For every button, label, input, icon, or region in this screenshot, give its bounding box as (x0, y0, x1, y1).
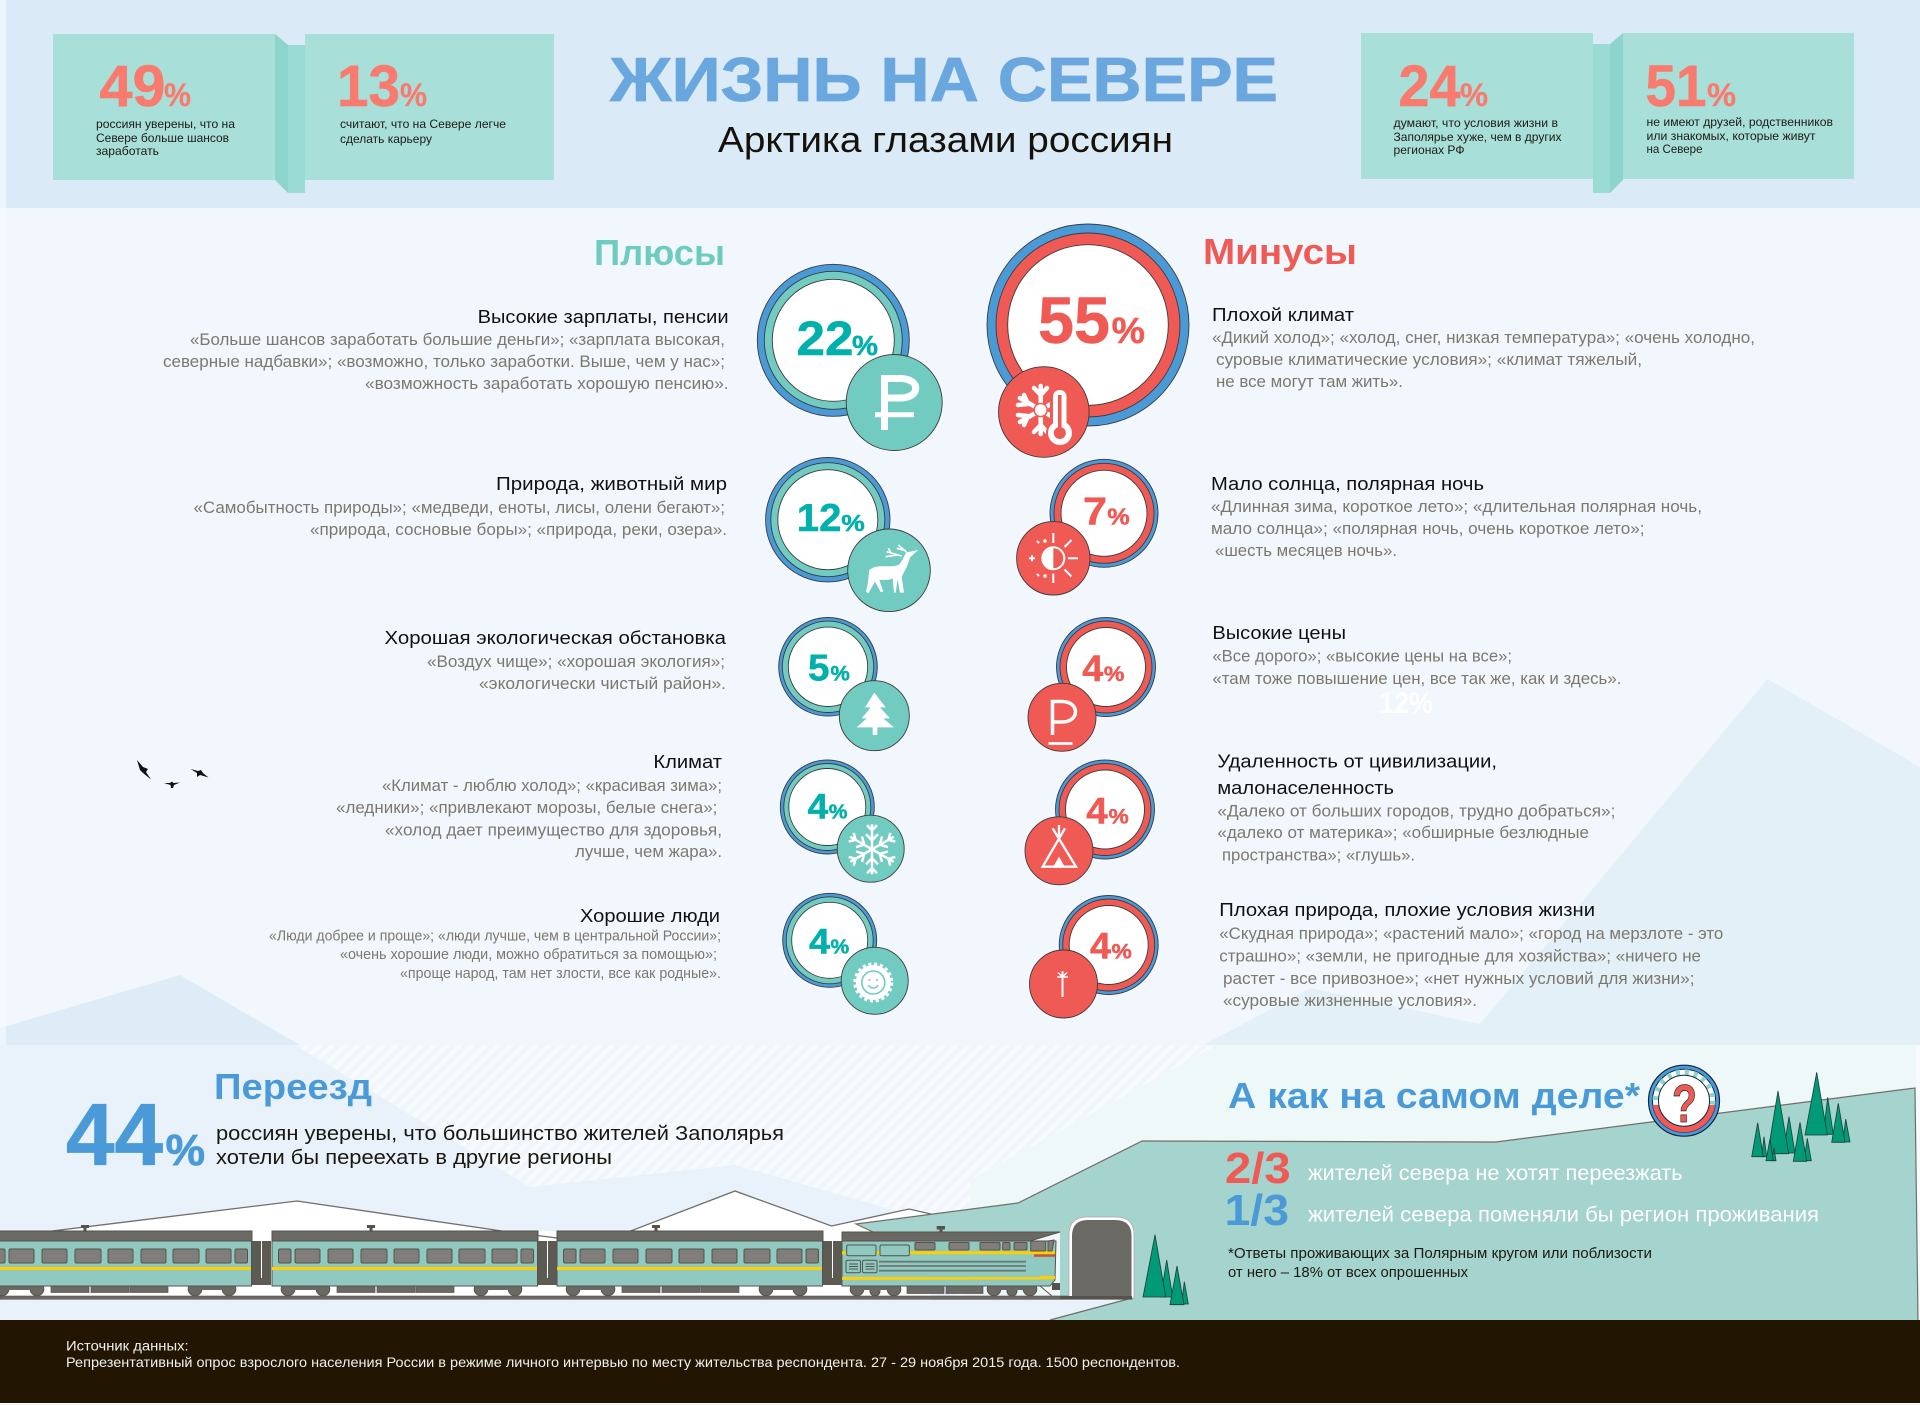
stat box: 49%: 49 (100, 54, 166, 119)
gauge: 55% climate: % (1112, 310, 1145, 351)
icon: snowflake and thermometer (1018, 386, 1074, 447)
text block: high prices: Высокие цены (1212, 622, 1346, 643)
text block: remoteness (1217, 750, 1615, 864)
text block: poor nature (1219, 899, 1723, 1010)
stat: two thirds: 2/3 (1225, 1144, 1291, 1193)
big stat: 44%: 44 (66, 1085, 163, 1184)
text block: good people (269, 905, 721, 982)
snowy mountains behind train (0, 1191, 931, 1300)
gauge: 4% poor nature: % (1112, 940, 1132, 963)
stat box: 49%: россиян уверены, что на (96, 117, 235, 131)
gauge: 5% ecology: % (830, 663, 850, 686)
text block: bad climate (1212, 304, 1755, 391)
gauge: 4% poor nature: 4 (1090, 925, 1111, 966)
text block: remoteness: малонаселенность (1217, 777, 1394, 798)
gauge: 4% high prices: % (1104, 663, 1125, 686)
text block: climate: «Климат - люблю холод»; «красивая зима»; (382, 777, 722, 795)
heading: moving: Переезд (214, 1066, 372, 1107)
stat: one third: жителей севера поменяли бы регион проживания (1308, 1202, 1819, 1226)
subtitle: Арктика глазами россиян (718, 119, 1173, 160)
stat box: 13%: считают, что на Севере легче (340, 117, 506, 131)
text block: good people: «проще народ, там нет злости, все как родные». (400, 966, 721, 982)
panel: header band (0, 0, 1920, 208)
icon: smiling sun (855, 964, 891, 1000)
land: teal hillside (856, 1088, 1918, 1320)
text block: little sun: Мало солнца, полярная ночь (1211, 473, 1484, 494)
panel: footer (0, 1320, 1920, 1405)
gauge: 4% people: % (830, 936, 849, 958)
text block: bad climate: Плохой климат (1212, 304, 1355, 325)
gauge: 4% climate: % (829, 801, 848, 823)
icon: ruble (875, 378, 916, 430)
text block: moving description: россиян уверены, что большинство жителей Заполярья (216, 1122, 784, 1145)
trees by tunnel (1143, 1235, 1188, 1305)
header stat ribbon right (1361, 33, 1854, 193)
text block: little sun (1211, 473, 1702, 560)
gauge: 7% little sun (1017, 459, 1158, 595)
passenger car 1 (0, 1225, 271, 1296)
text block: remoteness: «Далеко от больших городов, трудно добраться»; (1217, 802, 1615, 820)
heading: reality: А как на самом деле* (1228, 1075, 1640, 1116)
icon: half sun (1029, 533, 1078, 583)
text block: poor nature: Плохая природа, плохие условия жизни (1219, 899, 1595, 920)
gauge: 4% remoteness: % (1108, 805, 1129, 828)
stat box: 49%: заработать (96, 144, 159, 158)
text block: good people: Хорошие люди (580, 905, 720, 926)
stat box: 13%: % (400, 77, 427, 113)
passenger car 2 (272, 1225, 557, 1296)
text block: nature and wildlife: «Самобытность природы»; «медведи, еноты, лисы, олени бегают»; (194, 499, 725, 517)
heading: pluses: Плюсы (594, 232, 725, 273)
text block: high salaries: северные надбавки»; «возможно, только заработки. Выше, чем у нас»; (163, 353, 725, 371)
rail track (0, 1296, 1132, 1299)
train (0, 1225, 1060, 1296)
text block: climate (336, 751, 723, 861)
footnote (1228, 1246, 1652, 1281)
icon: tepee (1043, 825, 1076, 867)
gauge: 55% climate: 55 (1038, 283, 1110, 357)
text block: good people: «очень хорошие люди, можно обратиться за помощью»; (340, 947, 717, 963)
stat box: 51%: 51 (1646, 54, 1706, 119)
text block: high salaries: Высокие зарплаты, пенсии (478, 306, 729, 327)
text block: good people: «Люди добрее и проще»; «люди лучше, чем в центральной России»; (269, 928, 721, 944)
icon: withered plant (1057, 971, 1068, 997)
locomotive (823, 1226, 1060, 1296)
text block: remoteness: «далеко от материка»; «обширные безлюдные (1217, 824, 1589, 842)
text block: poor nature: страшно»; «земли, не пригодные для хозяйства»; «ничего не (1219, 948, 1701, 966)
gauge: 4% remoteness (1025, 760, 1154, 885)
passenger car 3 (557, 1225, 842, 1296)
text block: climate: Климат (653, 751, 723, 772)
stat: one third: 1/3 (1224, 1186, 1289, 1235)
gauge: 55% climate (987, 224, 1189, 457)
gauge: 4% climate: 4 (808, 787, 829, 826)
text block: remoteness: пространства»; «глушь». (1222, 846, 1415, 864)
header stat ribbon left (53, 34, 554, 193)
text block: high prices (1212, 622, 1621, 688)
stat box: 24%: Заполярье хуже, чем в других (1394, 130, 1562, 144)
gauge: 4% remoteness: 4 (1086, 790, 1108, 831)
text block: high salaries (163, 306, 729, 393)
stat box: 51% (1623, 33, 1854, 179)
text block: moving description (216, 1122, 784, 1169)
background mountains (0, 0, 1920, 1047)
stat box: 24% (1361, 33, 1593, 179)
text block: nature and wildlife (194, 473, 727, 539)
text block: climate: «ледники»; «привлекают морозы, белые снега»; (336, 799, 717, 817)
panel: footer: Источник данных: (66, 1338, 189, 1354)
stat box: 24%: % (1460, 77, 1488, 113)
heading: minuses: Минусы (1203, 231, 1357, 272)
gauge: 7% little sun: % (1107, 503, 1130, 529)
text block: little sun: мало солнца»; «полярная ночь, очень короткое лето»; (1211, 520, 1644, 538)
footnote: от него – 18% от всех опрошенных (1228, 1265, 1469, 1281)
text block: high prices: «Все дорого»; «высокие цены на все»; (1212, 648, 1512, 666)
icon: deer (866, 545, 918, 593)
icon: ruble sign underlined (1048, 702, 1076, 744)
stat box: 24%: 24 (1398, 54, 1460, 119)
stat: two thirds: жителей севера не хотят переезжать (1308, 1161, 1683, 1185)
text block: climate: «холод дает преимущество для здоровья, (385, 822, 722, 840)
tunnel (1060, 1217, 1134, 1299)
gauge: 5% ecology (779, 618, 909, 751)
gauge: 4% people: 4 (809, 922, 831, 961)
text block: bad climate: не все могут там жить». (1216, 373, 1403, 391)
ribbon fold left (275, 34, 305, 193)
gauge: 4% poor nature (1030, 896, 1158, 1018)
stat box: 13% (305, 34, 554, 180)
text block: bad climate: суровые климатические условия»; «климат тяжелый, (1216, 351, 1642, 369)
text block: ecology: «Воздух чище»; «хорошая экология»; (427, 653, 725, 671)
text block: poor nature: «суровые жизненные условия». (1223, 992, 1477, 1010)
text block: poor nature: растет - все привозное»; «нет нужных условий для жизни»; (1223, 970, 1694, 988)
title: ЖИЗНЬ НА СЕВЕРЕ (609, 46, 1278, 115)
footnote: *Ответы проживающих за Полярным кругом или поблизости (1228, 1246, 1652, 1262)
text block: little sun: «шесть месяцев ночь». (1215, 542, 1397, 560)
gauge: 12% nature (766, 458, 930, 612)
ribbon fold right (1593, 33, 1623, 193)
icon: question badge (1648, 1065, 1720, 1136)
text block: moving description: хотели бы переехать в другие регионы (216, 1146, 612, 1169)
icon: fir tree (857, 693, 894, 735)
text block: bad climate: «Дикий холод»; «холод, снег, низкая температура»; «очень холодно, (1212, 329, 1755, 347)
gauge: 12% nature: 12 (797, 497, 842, 540)
panel: bottom band background (0, 1045, 1920, 1320)
birds (137, 760, 208, 788)
stat box: 49% (53, 34, 276, 180)
gauge: 4% high prices: 4 (1082, 648, 1104, 689)
panel: footer: Репрезентативный опрос взрослого населения России в режиме личного интервью по месту жительства респондента. 27 - 29 ноября 2015 года. 1500 респондентов. (66, 1355, 1180, 1370)
stat box: 51%: не имеют друзей, родственников (1646, 115, 1833, 129)
gauge: 22% salaries: 22 (796, 313, 854, 366)
gauge: 22% salaries: % (852, 330, 878, 361)
icon: question badge: ? (1672, 1074, 1697, 1134)
text block: high salaries: «возможность заработать хорошую пенсию». (365, 375, 729, 393)
stat box: 13%: сделать карьеру (340, 132, 432, 146)
text block: ecology: Хорошая экологическая обстановка (384, 627, 727, 648)
stray white figure: 12% (1379, 687, 1433, 720)
text block: remoteness: Удаленность от цивилизации, (1217, 750, 1497, 772)
text block: high prices: «там тоже повышение цен, все так же, как и здесь». (1212, 670, 1621, 688)
stat box: 24%: думают, что условия жизни в (1394, 116, 1558, 130)
gauge: 12% nature: % (841, 510, 865, 536)
stat: two thirds (1225, 1144, 1683, 1193)
stat box: 13%: 13 (337, 54, 400, 119)
stat box: 49%: % (164, 77, 191, 113)
stat box: 51%: на Севере (1646, 142, 1703, 156)
gauge: 4% people (783, 893, 908, 1014)
big stat: 44%: % (166, 1126, 205, 1175)
stat box: 51%: % (1707, 77, 1736, 113)
stat box: 51%: или знакомых, которые живут (1646, 129, 1816, 143)
gauge: 7% little sun: 7 (1083, 490, 1107, 533)
gauge: 5% ecology: 5 (808, 648, 830, 689)
text block: ecology (384, 627, 727, 693)
gauge: 22% salaries (757, 264, 942, 450)
text block: nature and wildlife: Природа, животный мир (496, 473, 727, 494)
gauge: 4% high prices (1028, 618, 1156, 751)
stat: one third (1224, 1186, 1819, 1235)
gauge: 4% climate (780, 760, 904, 882)
text block: poor nature: «Скудная природа»; «растений мало»; «город на мерзлоте - это (1219, 925, 1723, 943)
text block: high salaries: «Больше шансов заработать большие деньги»; «зарплата высокая, (190, 331, 725, 349)
text block: nature and wildlife: «природа, сосновые боры»; «природа, реки, озера». (310, 521, 727, 539)
stat box: 49%: Севере больше шансов (96, 131, 229, 145)
text block: climate: лучше, чем жара». (575, 843, 722, 861)
trees on the hill (1752, 1072, 1850, 1161)
stat box: 24%: регионах РФ (1394, 143, 1465, 157)
icon: snowflake (847, 824, 897, 874)
text block: ecology: «экологически чистый район». (479, 675, 726, 693)
text block: little sun: «Длинная зима, короткое лето»; «длительная полярная ночь, (1211, 498, 1702, 516)
